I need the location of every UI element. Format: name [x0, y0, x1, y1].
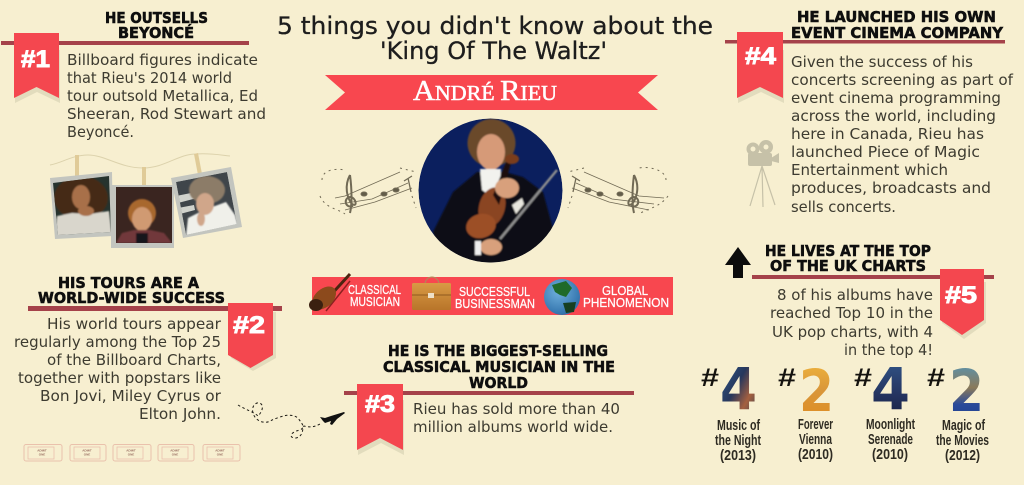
body text: of the Billboard Charts, [47, 351, 221, 369]
icon: plane with dashed flight path [238, 403, 345, 438]
heading [105, 9, 208, 42]
label: successful businessman [455, 284, 535, 311]
body text: Sheeran, Rod Stewart and [67, 105, 266, 123]
body text: million albums world wide. [413, 418, 613, 436]
body text: here in Canada, Rieu has [791, 125, 984, 143]
body text: concerts screening as part of [791, 71, 1014, 89]
ticket 2: ONE [84, 452, 90, 456]
album: Moonlight Serenade: (2010) [872, 446, 908, 463]
heading [383, 342, 615, 392]
heading: EVENT CINEMA COMPANY [791, 24, 1004, 42]
heading [791, 8, 1004, 42]
ribbon #3 [357, 384, 404, 455]
body text [770, 286, 933, 359]
icon: music notes right [568, 168, 668, 214]
photo: Rod Stewart [171, 167, 242, 238]
body text: Elton John. [139, 405, 221, 423]
ticket 1 [24, 444, 62, 461]
album: Moonlight Serenade: Serenade [868, 431, 913, 448]
body text: His world tours appear [47, 315, 222, 333]
label: successful businessman: BUSINESSMAN [455, 296, 535, 311]
body text [67, 51, 266, 141]
album: Moonlight Serenade: Moonlight [866, 416, 915, 433]
heading: HE LAUNCHED HIS OWN [797, 8, 996, 26]
heading [765, 242, 931, 275]
panel: fact 4 [725, 8, 1014, 216]
heading: HE OUTSELLS [105, 9, 208, 27]
album: Forever Vienna [778, 357, 834, 463]
body text: produces, broadcasts and [791, 179, 991, 197]
ticket 2: ADMIT [82, 448, 92, 452]
name banner [325, 75, 658, 110]
ticket 3 [113, 444, 151, 461]
body text: tour outsold Metallica, Ed [67, 87, 258, 105]
portrait of André Rieu [418, 118, 562, 268]
photo: Beyoncé [50, 172, 114, 239]
name banner: ANDRÉ RIEU [413, 75, 557, 107]
heading: HIS TOURS ARE A [58, 274, 199, 292]
heading: BEYONCÉ [118, 23, 194, 42]
ticket 3: ONE [128, 452, 134, 456]
album: Forever Vienna: 2 [799, 357, 834, 425]
tickets [24, 444, 240, 461]
body text: reached Top 10 in the [770, 304, 933, 322]
album: Forever Vienna: # [778, 364, 796, 392]
album: Music of the Night: 4 [720, 355, 757, 423]
icon: music notes left [320, 168, 416, 214]
label: classical musician: CLASSICAL [348, 282, 401, 297]
ticket 1: ADMIT [37, 448, 47, 452]
label: classical musician: MUSICIAN [350, 294, 400, 309]
album: Moonlight Serenade [854, 355, 915, 463]
ticket 4 [158, 444, 194, 461]
ticket 4: ONE [172, 452, 178, 456]
label: global phenomenon: GLOBAL [602, 283, 648, 298]
body text: across the world, including [791, 107, 996, 125]
title [277, 12, 713, 65]
icon: film camera [746, 140, 779, 207]
ticket 5: ONE [217, 452, 223, 456]
album: Forever Vienna: Vienna [799, 431, 832, 448]
panel: fact 2 [14, 274, 345, 461]
body text [413, 400, 620, 436]
label: classical musician [348, 282, 401, 309]
ticket 2 [70, 444, 106, 461]
album: Music of the Night [701, 355, 761, 464]
photo: Ed Sheeran [111, 185, 174, 248]
album: Magic of the Movies: the Movies [936, 432, 989, 449]
hanging photos [50, 153, 242, 248]
album: Music of the Night: the Night [715, 432, 761, 449]
body text: Rieu has sold more than 40 [413, 400, 620, 418]
album: Moonlight Serenade: 4 [871, 355, 910, 423]
body text [791, 53, 1014, 216]
ribbon #2: #2 [233, 312, 265, 339]
icon: globe [544, 279, 580, 315]
panel: fact 3 [344, 342, 634, 455]
ticket 4: ADMIT [170, 448, 180, 452]
body text: Entertainment which [791, 161, 948, 179]
title: 5 things you didn't know about the [277, 12, 713, 40]
album: Forever Vienna: Forever [798, 416, 833, 433]
heading: HE LIVES AT THE TOP [765, 242, 931, 260]
ticket 1: ONE [39, 452, 45, 456]
album: Music of the Night: # [701, 364, 719, 392]
ribbon #4: #4 [745, 43, 777, 70]
body text: together with popstars like [18, 369, 221, 387]
heading: OF THE UK CHARTS [770, 257, 926, 275]
heading: WORLD-WIDE SUCCESS [38, 289, 225, 307]
body text: UK pop charts, with 4 [772, 323, 933, 341]
ribbon #2 [228, 303, 276, 371]
album: Moonlight Serenade: # [854, 364, 872, 392]
ticket 3: ADMIT [126, 448, 136, 452]
panel: fact 1 [1, 9, 266, 248]
ribbon #5: #5 [945, 282, 977, 309]
title: 'King Of The Waltz' [380, 37, 607, 65]
heading: HE IS THE BIGGEST-SELLING [388, 342, 608, 360]
album: Magic of the Movies: 2 [949, 357, 984, 425]
red strip: three roles [308, 274, 673, 315]
ribbon #4 [737, 32, 784, 103]
album: Magic of the Movies: (2012) [945, 447, 980, 464]
heading: CLASSICAL MUSICIAN IN THE [383, 358, 615, 376]
ticket 5: ADMIT [215, 448, 225, 452]
body text: Billboard figures indicate [67, 51, 258, 69]
heading [38, 274, 225, 307]
body text: event cinema programming [791, 89, 1001, 107]
ribbon #1 [14, 33, 60, 103]
body text: sells concerts. [791, 198, 896, 216]
body text: Bon Jovi, Miley Cyrus or [40, 387, 222, 405]
album: Music of the Night: (2013) [720, 447, 756, 464]
ribbon #1: #1 [21, 46, 50, 73]
ticket 5 [203, 444, 240, 461]
icon: briefcase [412, 277, 451, 310]
body text: Beyoncé. [67, 123, 134, 141]
label: successful businessman: SUCCESSFUL [459, 284, 530, 299]
icon: violin [308, 274, 350, 314]
body text [14, 315, 222, 423]
album: Magic of the Movies: Magic of [942, 417, 986, 434]
body text: in the top 4! [844, 341, 933, 359]
label: global phenomenon [583, 283, 669, 310]
album: Forever Vienna: (2010) [798, 446, 833, 463]
ribbon #3: #3 [365, 391, 395, 418]
body text: that Rieu's 2014 world [67, 69, 232, 87]
ribbon #5 [940, 269, 986, 339]
album: Magic of the Movies: # [927, 364, 945, 392]
body text: 8 of his albums have [777, 286, 933, 304]
body text: Given the success of his [791, 53, 973, 71]
album: Magic of the Movies [927, 357, 989, 464]
body text: launched Piece of Magic [791, 143, 980, 161]
panel: fact 5 [701, 242, 994, 464]
label: global phenomenon: PHENOMENON [583, 295, 669, 310]
heading: WORLD [469, 374, 528, 392]
icon: up arrow [725, 247, 751, 278]
album: Music of the Night: Music of [717, 417, 761, 434]
body text: regularly among the Top 25 [14, 333, 221, 351]
